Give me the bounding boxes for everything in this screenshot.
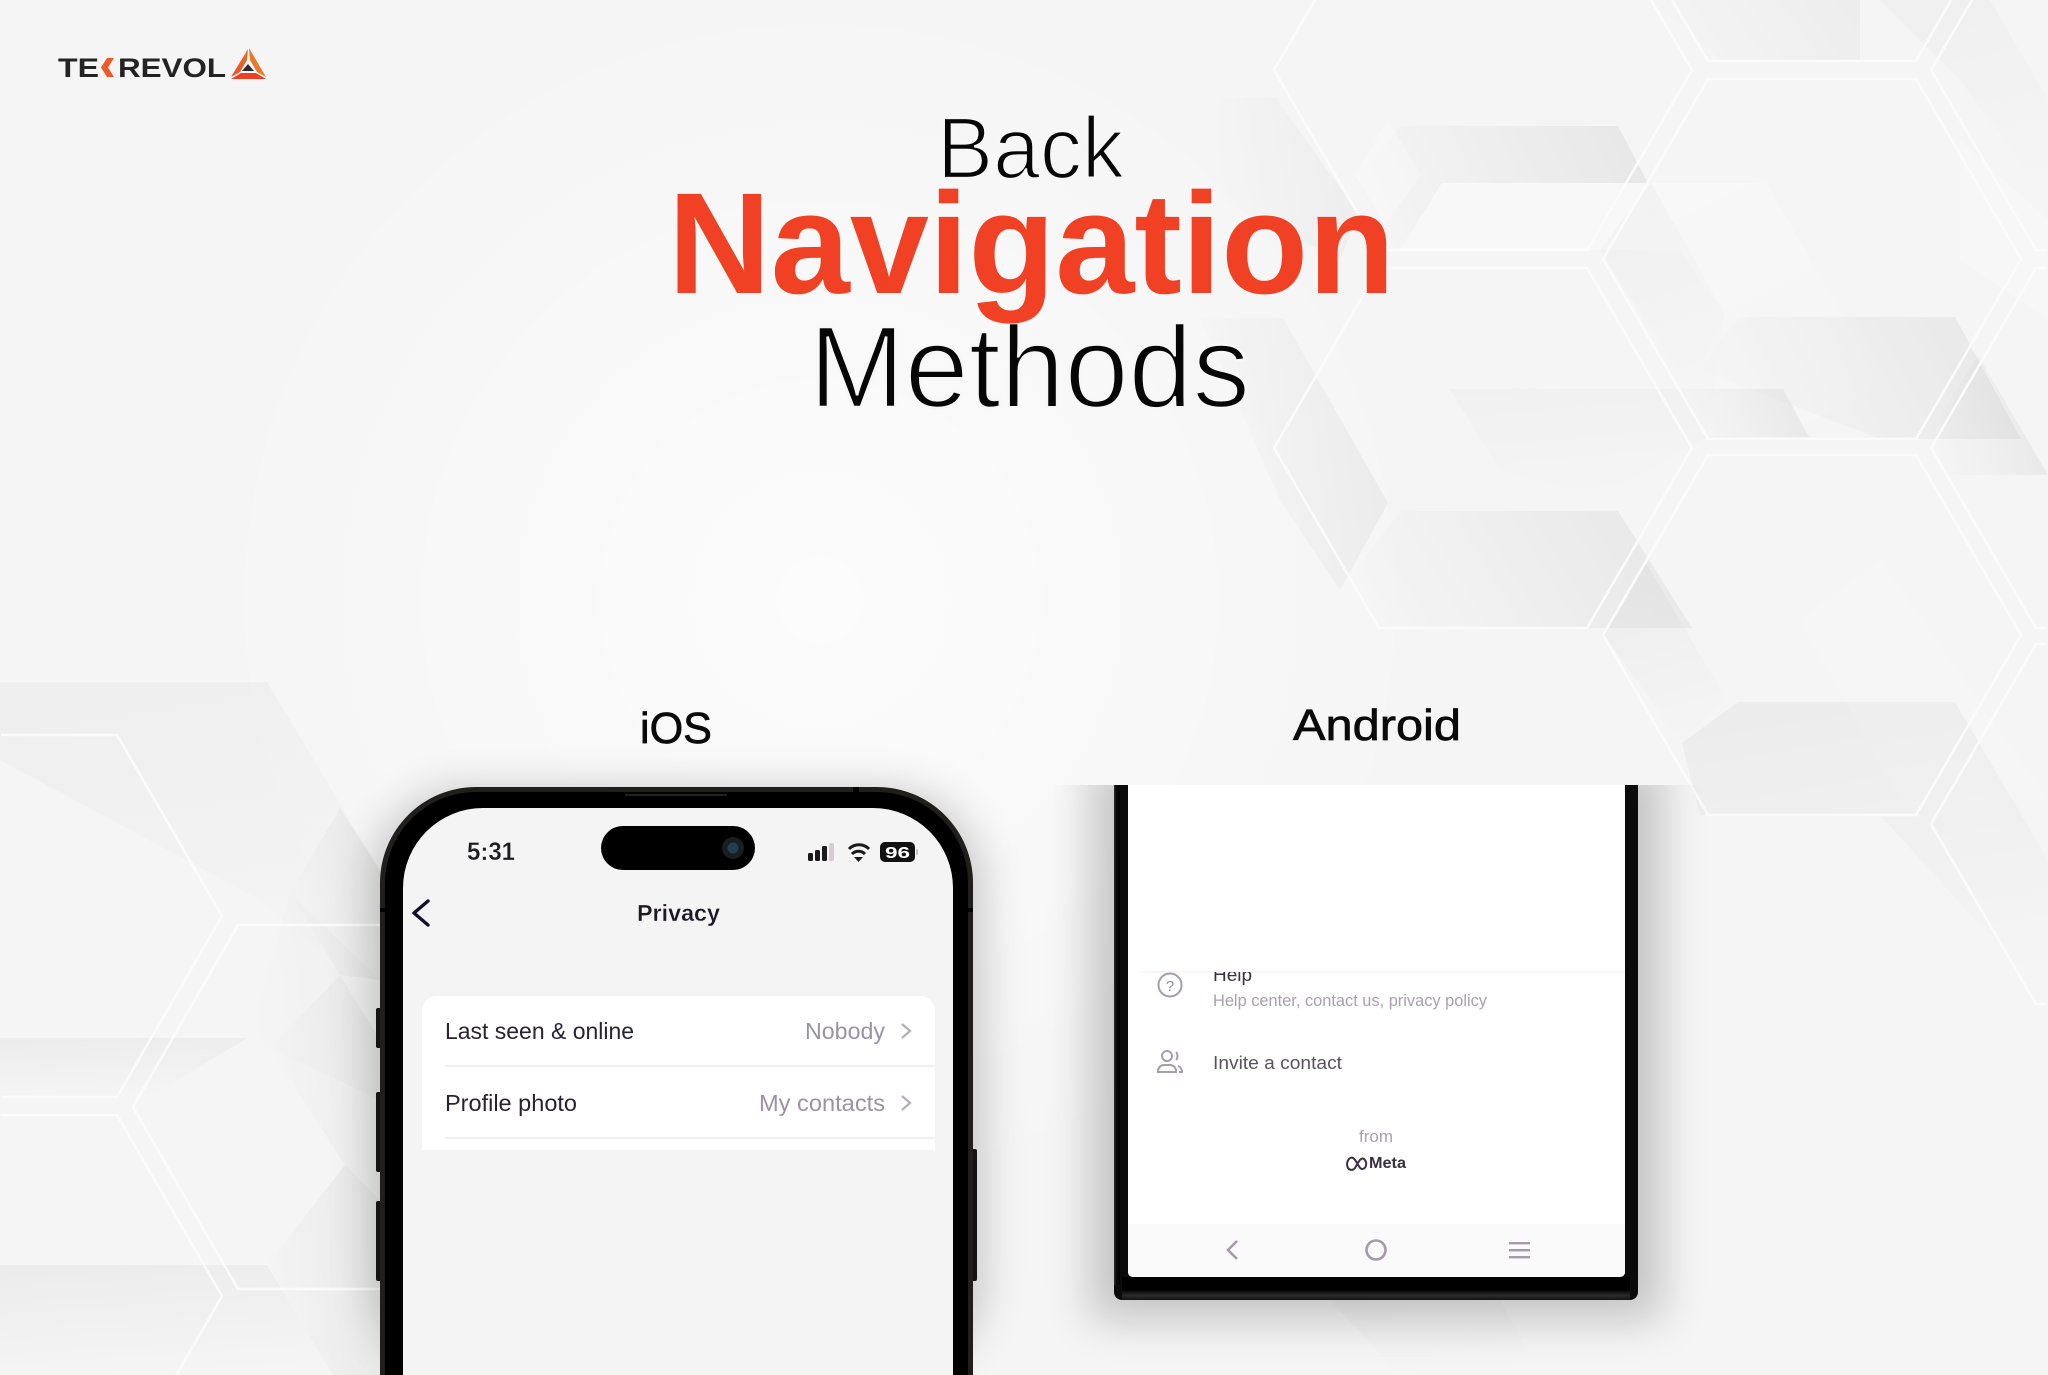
dynamic island [601, 826, 755, 870]
logo wordmark start: TE [58, 53, 99, 83]
menu row: Help: ? [1166, 978, 1174, 995]
title line: Methods: Methods [809, 302, 1250, 432]
iPhone mockup [372, 787, 982, 1375]
iPhone shadow [372, 790, 982, 1375]
logo: TekRevol: REVOL [118, 53, 226, 83]
menu row: Help [1158, 972, 1487, 1010]
iPhone frame [380, 787, 973, 1375]
screen title: Privacy: Privacy [637, 900, 720, 926]
Android screen [1128, 785, 1625, 1277]
row: profile photo: Profile photo [445, 1090, 577, 1116]
Android navigation bar [1128, 1224, 1625, 1277]
menu row: Help: Help [1213, 964, 1252, 985]
menu row: Help: Help center, contact us, privacy policy [1213, 992, 1488, 1010]
side buttons [376, 1008, 977, 1281]
from Meta [1347, 1127, 1406, 1172]
from Meta: from [1359, 1127, 1393, 1146]
row: last seen: Nobody [805, 1018, 885, 1044]
status time: 5:31 [467, 838, 515, 866]
heading: iOS: iOS [640, 704, 712, 753]
Android frame [1114, 785, 1638, 1300]
heading: Android: Android [1293, 701, 1461, 750]
menu row: Invite a contact: Invite a contact [1213, 1052, 1342, 1073]
logo: TekRevol [58, 48, 266, 83]
title line: Navigation: Navigation [668, 163, 1395, 324]
Android phone mockup [1090, 760, 1662, 1320]
menu row: Invite a contact [1158, 1051, 1342, 1073]
title line: Back: Back [937, 100, 1124, 197]
back arrow [414, 901, 428, 925]
title [668, 100, 1395, 432]
Android shadow [1090, 760, 1662, 1320]
row: last seen [445, 1018, 910, 1044]
row: profile photo: My contacts [759, 1090, 885, 1116]
iPhone screen [403, 808, 953, 1375]
row: last seen: Last seen & online [445, 1018, 634, 1044]
status icons: 96 [885, 845, 910, 862]
row: profile photo [445, 1090, 910, 1116]
from Meta: Meta [1369, 1155, 1406, 1172]
status icons [808, 842, 918, 862]
settings card [422, 996, 935, 1150]
